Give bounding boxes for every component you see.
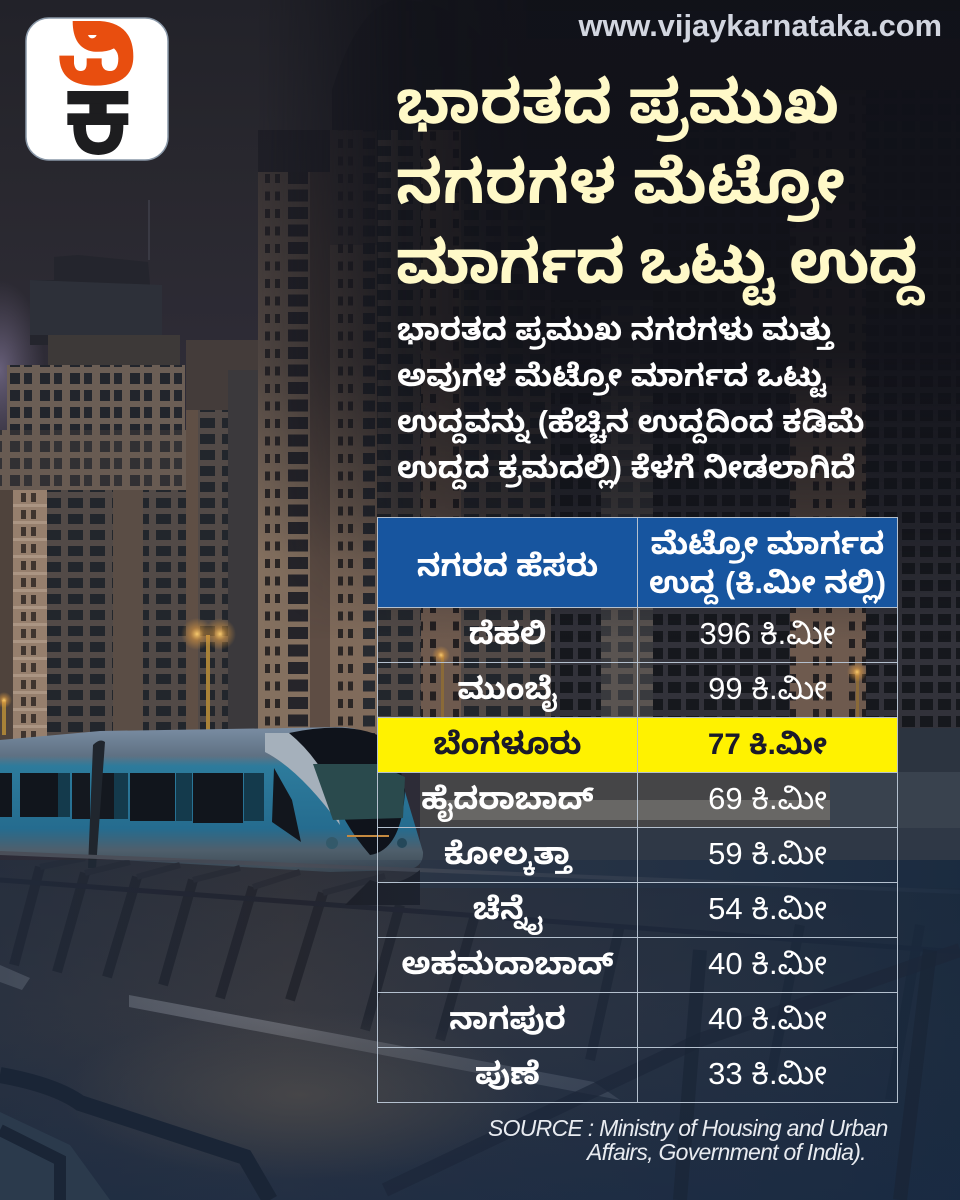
source note: SOURCE : Ministry of Housing and Urban [488, 1115, 888, 1141]
left hotel lower floors [0, 490, 14, 740]
street lamps [206, 635, 210, 730]
intro text: ಭಾರತದ ಪ್ರಮುಖ ನಗರಗಳು ಮತ್ತು [397, 313, 833, 347]
row: Delhi: ದೆಹಲಿ [469, 616, 546, 650]
row: Pune: ಪುಣೆ [475, 1056, 540, 1090]
row: Kolkata: ಕೋಲ್ಕತ್ತಾ [444, 836, 571, 870]
website url: www.vijaykarnataka.com [579, 8, 942, 43]
table header: ಉದ್ದ (ಕಿ.ಮೀ ನಲ್ಲಿ) [649, 566, 886, 600]
table header: ನಗರದ ಹೆಸರು [417, 548, 598, 582]
row: Nagpur: 40 ಕಿ.ಮೀ [708, 1001, 827, 1036]
row: Pune [377, 1048, 898, 1103]
table header [377, 517, 898, 608]
row: Chennai: ಚೆನ್ನೈ [473, 892, 542, 926]
left hotel upper floors [7, 365, 185, 435]
row: Mumbai: 99 ಕಿ.ಮೀ [708, 671, 827, 706]
row: Hyderabad: 69 ಕಿ.ಮೀ [708, 781, 827, 816]
row: Delhi [377, 608, 898, 663]
title: ಮಾರ್ಗದ ಒಟ್ಟು ಉದ್ದ [396, 229, 920, 296]
centre towers [258, 172, 310, 732]
row: Nagpur [377, 993, 898, 1048]
intro text: ಅವುಗಳ ಮೆಟ್ರೋ ಮಾರ್ಗದ ಒಟ್ಟು [397, 359, 826, 393]
row: Bengaluru highlighted: ಬೆಂಗಳೂರು [433, 726, 582, 760]
shade over upper right [280, 0, 960, 622]
row: Ahmedabad: ಅಹಮದಾಬಾದ್ [401, 946, 614, 980]
train [0, 727, 423, 872]
road, bridge and ground [0, 860, 960, 1200]
row: Kolkata: 59 ಕಿ.ಮೀ [708, 836, 827, 871]
source note [488, 1115, 888, 1165]
table header: ಮೆಟ್ರೋ ಮಾರ್ಗದ [651, 526, 884, 560]
row: Mumbai [377, 663, 898, 718]
intro text: ಉದ್ದವನ್ನು (ಹೆಚ್ಚಿನ ಉದ್ದದಿಂದ ಕಡಿಮೆ [397, 405, 864, 439]
row: Pune: 33 ಕಿ.ಮೀ [708, 1056, 827, 1091]
row: Ahmedabad [377, 938, 898, 993]
row: Mumbai: ಮುಂಬೈ [458, 672, 557, 706]
row: Hyderabad: ಹೈದರಾಬಾದ್ [421, 782, 594, 816]
row: Hyderabad [377, 773, 898, 828]
table: metro length by city [377, 517, 898, 1103]
row: Delhi: 396 ಕಿ.ಮೀ [700, 616, 835, 651]
title [396, 69, 925, 306]
row: Bengaluru highlighted: 77 ಕಿ.ಮೀ [708, 728, 827, 760]
row: Kolkata [377, 828, 898, 883]
row: Chennai [377, 883, 898, 938]
intro text: ಉದ್ದದ ಕ್ರಮದಲ್ಲಿ) ಕೆಳಗೆ ನೀಡಲಾಗಿದೆ [397, 451, 855, 485]
mid and right buildings behind the table [421, 130, 461, 730]
source note: Affairs, Government of India). [587, 1139, 866, 1165]
row: Chennai: 54 ಕಿ.ಮೀ [708, 891, 827, 926]
row: Bengaluru highlighted [377, 718, 898, 773]
title: ಭಾರತದ ಪ್ರಮುಖ [396, 69, 839, 136]
icon: Vijay Karnataka logo [25, 17, 169, 161]
guard rail [14, 867, 920, 1100]
intro text [397, 313, 864, 490]
row: Nagpur: ನಾಗಪುರ [449, 1002, 566, 1036]
foreground railings [0, 1112, 110, 1200]
row: Ahmedabad: 40 ಕಿ.ಮೀ [708, 946, 827, 981]
title: ನಗರಗಳ ಮೆಟ್ರೋ [396, 149, 846, 216]
left hotel crown [30, 255, 162, 345]
